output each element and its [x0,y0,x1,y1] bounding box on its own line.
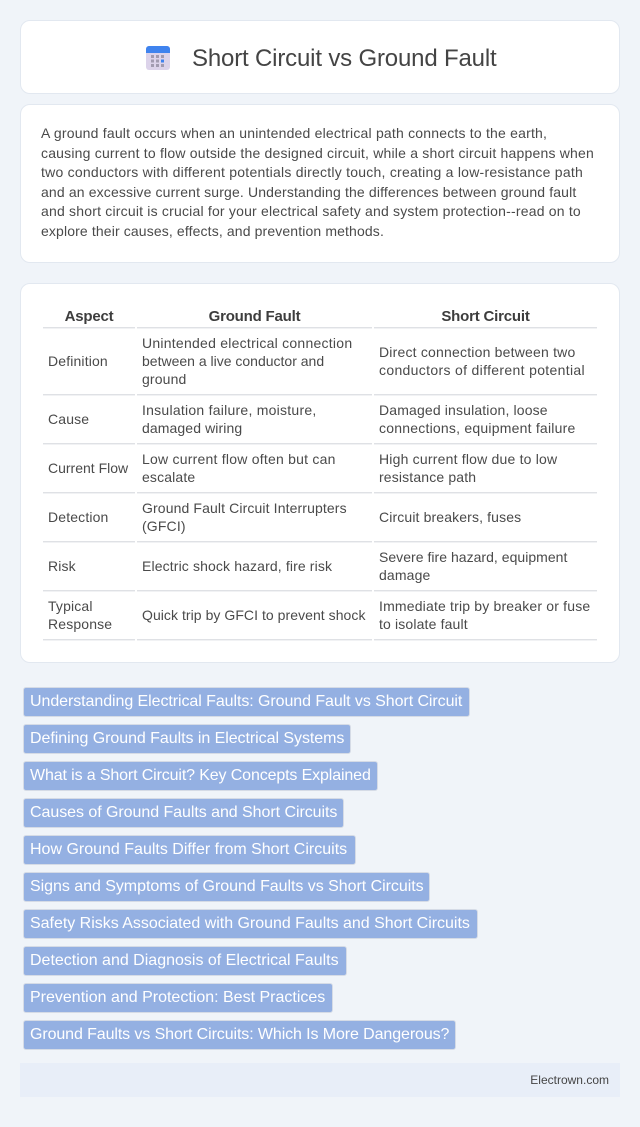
link chip 2: Defining Ground Faults in Electrical Systems [30,730,344,747]
table rows: Risk [48,558,76,574]
intro paragraph: and short circuit is crucial for your electrical safety and system protection--read on to [41,203,581,219]
table rows: Severe fire hazard, equipment [379,549,567,565]
table header: Short Circuit [441,308,530,325]
panel: comparison table [20,283,620,663]
table rows: to isolate fault [379,616,468,632]
table rows: (GFCI) [142,518,186,534]
table rows: Detection [48,509,108,525]
table rows: Electric shock hazard, fire risk [142,558,332,574]
section link list [23,687,478,1050]
intro paragraph: and an excessive current surge. Understanding the differences between ground fault [41,184,576,200]
table rows: damage [379,567,430,583]
table rows: conductors of different potential [379,362,585,378]
table rows: between a live conductor and [142,353,324,369]
table header: Ground Fault [209,308,300,325]
link chip 2 [23,724,351,754]
link chip 1: Understanding Electrical Faults: Ground Fault vs Short Circuit [30,693,462,710]
table rows: Response [48,616,112,632]
table rows: escalate [142,469,195,485]
table rows: Definition [48,353,108,369]
link chip 4: Causes of Ground Faults and Short Circuits [30,804,337,821]
footer bar [20,1063,620,1097]
link chip 6: Signs and Symptoms of Ground Faults vs Short Circuits [30,878,424,895]
table rows: Insulation failure, moisture, [142,402,317,418]
link chip 4 [23,798,344,828]
link chip 7: Safety Risks Associated with Ground Faults and Short Circuits [30,915,470,932]
intro paragraph [41,125,594,239]
table rows: Typical [48,598,93,614]
footer source credit: Electrown.com [530,1073,609,1087]
table rows: ground [142,371,186,387]
table rows: Direct connection between two [379,344,575,360]
link chip 8: Detection and Diagnosis of Electrical Faults [30,952,339,969]
table rows: damaged wiring [142,420,242,436]
link chip 9: Prevention and Protection: Best Practices [30,989,325,1006]
link chip 3: What is a Short Circuit? Key Concepts Explained [30,767,371,784]
link chip 3 [23,761,378,791]
table rows: connections, equipment failure [379,420,576,436]
table rows: Low current flow often but can [142,451,336,467]
link chip 1 [23,687,470,717]
icon: calendar grid [146,46,170,70]
link chip 8 [23,946,347,976]
table rows: Unintended electrical connection [142,335,352,351]
panel: intro text [20,104,620,263]
table rows: Ground Fault Circuit Interrupters [142,500,347,516]
table rows: High current flow due to low [379,451,557,467]
table rows: Circuit breakers, fuses [379,509,521,525]
link chip 9 [23,983,333,1013]
title: Short Circuit vs Ground Fault [192,45,497,72]
intro paragraph: causing current to flow outside the designed circuit, while a short circuit happens when [41,145,594,161]
comparison table [43,308,597,641]
table rows: Immediate trip by breaker or fuse [379,598,590,614]
link chip 5: How Ground Faults Differ from Short Circuits [30,841,347,858]
link chip 5 [23,835,356,865]
intro paragraph: two conductors with different potentials directly touch, creating a low-resistance path [41,164,583,180]
table rows: resistance path [379,469,476,485]
link chip 10: Ground Faults vs Short Circuits: Which Is More Dangerous? [30,1026,449,1043]
table header [43,308,597,329]
link chip 10 [23,1020,456,1050]
table rows: Damaged insulation, loose [379,402,548,418]
link chip 7 [23,909,478,939]
table rows: Current Flow [48,460,128,476]
table rows [43,335,597,641]
link chip 6 [23,872,430,902]
table rows: Cause [48,411,89,427]
table rows: Quick trip by GFCI to prevent shock [142,607,366,623]
panel: title header [20,20,620,94]
intro paragraph: A ground fault occurs when an unintended electrical path connects to the earth, [41,125,547,141]
table header: Aspect [65,308,113,325]
intro paragraph: explore their causes, effects, and prevention methods. [41,223,384,239]
